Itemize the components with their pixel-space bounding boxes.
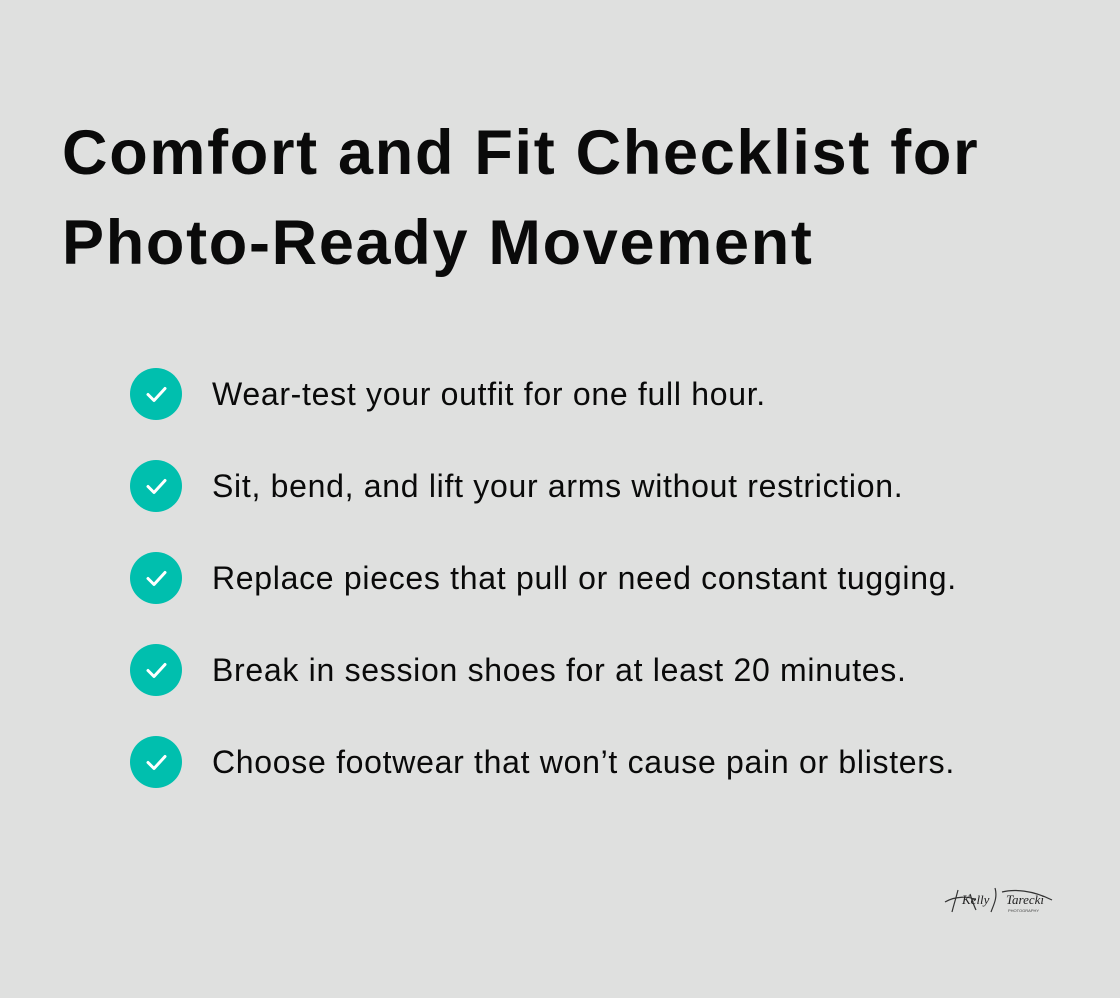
title: Photo-Ready Movement — [62, 208, 814, 278]
item 3: Replace pieces that pull or need constant tugging. — [212, 560, 957, 596]
item 1: Wear-test your outfit for one full hour. — [212, 376, 766, 412]
item 2 — [130, 460, 903, 512]
item 4 — [130, 644, 907, 696]
title: Comfort and Fit Checklist for — [62, 118, 979, 188]
logo: PHOTOGRAPHY — [1008, 908, 1039, 913]
title — [62, 118, 979, 278]
item 1 — [130, 368, 766, 420]
item 4: Break in session shoes for at least 20 minutes. — [212, 652, 907, 688]
checklist — [130, 368, 957, 788]
item 2: Sit, bend, and lift your arms without restriction. — [212, 468, 903, 504]
logo: Tarecki — [1006, 892, 1044, 907]
logo — [944, 888, 1052, 913]
logo: Kelly — [961, 892, 990, 907]
item 5: Choose footwear that won’t cause pain or blisters. — [212, 744, 955, 780]
item 3 — [130, 552, 957, 604]
item 5 — [130, 736, 955, 788]
